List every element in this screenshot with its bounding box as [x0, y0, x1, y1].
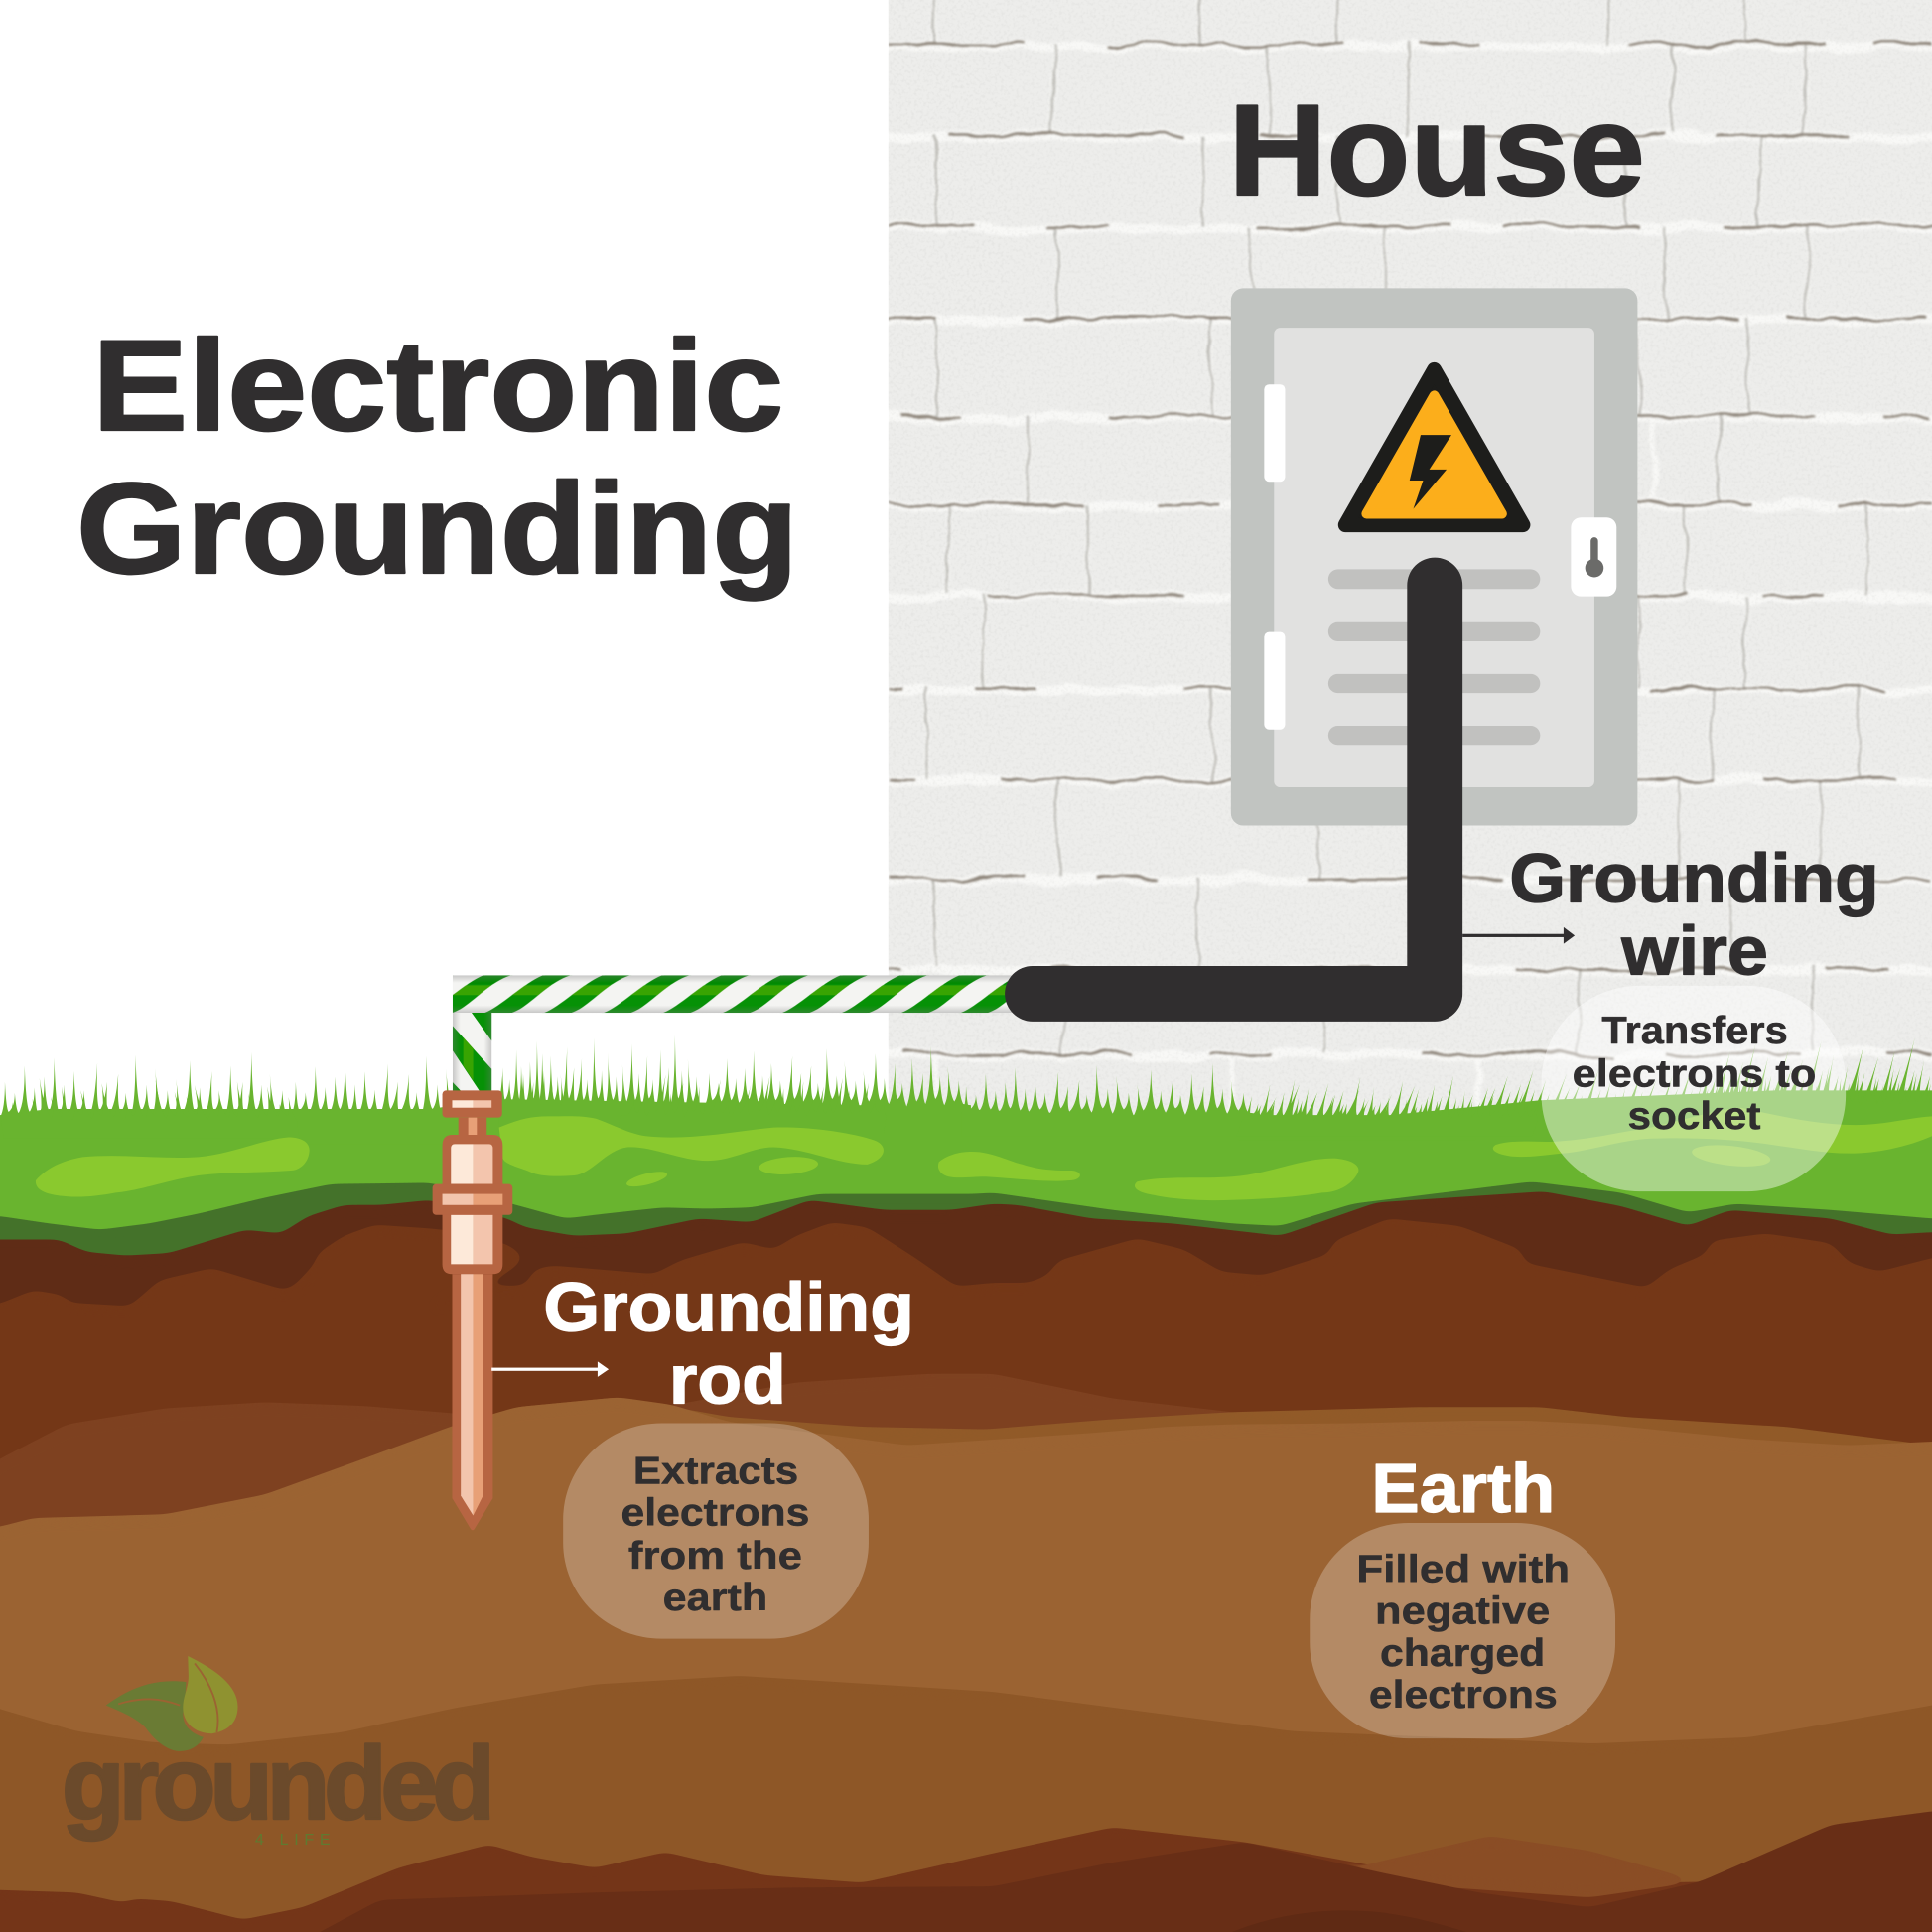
- logo: grounded 4 life: grounded: [62, 1726, 495, 1842]
- arrow: grounding wire: [1462, 927, 1575, 944]
- brick wall: [875, 0, 1932, 1146]
- deeper soil: [0, 1676, 1932, 1932]
- icon: high voltage warning triangle: [1345, 369, 1523, 525]
- soil and grass layers: [0, 1035, 1932, 1932]
- left hinge lower: [1264, 632, 1285, 730]
- icon: copper grounding rod: [433, 1090, 512, 1530]
- callout: Extracts electrons from the earth: electrons: [621, 1491, 809, 1534]
- grounding wire black indoor section: [1033, 586, 1435, 994]
- callout: Transfers electrons to socket: Transfers: [1601, 1010, 1788, 1052]
- callout: Filled with negative charged electrons: Filled with: [1356, 1549, 1570, 1591]
- label: Grounding rod: Grounding: [543, 1268, 914, 1345]
- callout: Extracts electrons from the earth: Extracts: [633, 1449, 798, 1492]
- dark topsoil: [0, 1191, 1932, 1380]
- lighter brown soil band: [0, 1374, 1932, 1725]
- grounding wire striped vertical section: [453, 1013, 491, 1092]
- grounding wire striped outdoor section: [453, 975, 1017, 1013]
- brown soil: [0, 1218, 1932, 1601]
- callout: Filled with negative charged electrons: negative: [1375, 1590, 1550, 1633]
- grass body: [0, 1090, 1932, 1269]
- vent lines: [1328, 569, 1540, 745]
- heading: Electronic Grounding: Grounding: [76, 456, 798, 601]
- grass highlights: [36, 1108, 1932, 1200]
- dark green grass underside: [0, 1181, 1932, 1307]
- callout: Extracts electrons from the earth: earth: [663, 1577, 767, 1619]
- callout: Extracts electrons from the earth: from the: [628, 1535, 802, 1578]
- label: Grounding rod: rod: [669, 1341, 786, 1419]
- lighter ridge: [1244, 1836, 1701, 1897]
- logo: grounded 4 life: 4 LIFE: [255, 1831, 331, 1849]
- arrow: grounding rod: [491, 1361, 609, 1377]
- callout: Filled with negative charged electrons: charged: [1380, 1632, 1545, 1675]
- label: Grounding rod: [543, 1268, 914, 1419]
- middle soil band: [454, 1397, 1932, 1725]
- callout: Transfers electrons to socket: [1542, 986, 1846, 1191]
- heading: Electronic Grounding: Electronic: [92, 313, 783, 458]
- bedrock back layer: [0, 1799, 1932, 1932]
- left hinge upper: [1264, 384, 1285, 482]
- logo: grounded 4 life: [62, 1656, 495, 1849]
- label: Grounding wire: Grounding: [1509, 839, 1879, 916]
- panel: electrical box: [1231, 288, 1637, 826]
- darkest lens: [1232, 1910, 1466, 1932]
- main light soil: [0, 1397, 1932, 1932]
- label: Grounding wire: [1509, 839, 1879, 990]
- label: Grounding wire: wire: [1620, 912, 1768, 990]
- label: Earth: Earth: [1371, 1449, 1555, 1527]
- heading: Electronic Grounding: [76, 313, 798, 601]
- icon: leaves: [106, 1656, 238, 1751]
- callout: Transfers electrons to socket: electrons to: [1573, 1053, 1816, 1096]
- blades of grass: [0, 1035, 1932, 1147]
- callout: Filled with negative charged electrons: electrons: [1369, 1674, 1558, 1717]
- callout: Filled with negative charged electrons: [1310, 1523, 1615, 1738]
- heading: House: House: [1228, 77, 1645, 222]
- dark bedrock front: [246, 1805, 1932, 1932]
- lock with keyhole: [1571, 517, 1616, 597]
- callout: Extracts electrons from the earth: [563, 1423, 869, 1639]
- callout: Transfers electrons to socket: socket: [1627, 1095, 1761, 1138]
